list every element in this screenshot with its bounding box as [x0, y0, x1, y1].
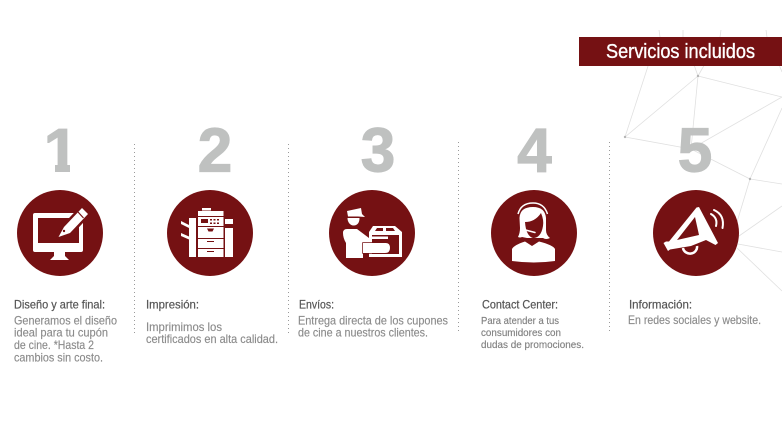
icon: copier — [167, 190, 253, 276]
step 3: envíos — [298, 116, 448, 340]
description: dudas de promociones. — [481, 339, 584, 351]
number 5: 5 — [678, 116, 712, 186]
label: Contact Center: Contact Center: — [482, 298, 558, 312]
icon: megaphone — [653, 190, 739, 276]
label: Envíos: Envíos: — [299, 298, 334, 312]
step 4: contact center — [481, 116, 584, 351]
step 2: impresión — [146, 116, 278, 346]
description — [298, 314, 448, 340]
description — [481, 315, 584, 351]
title banner: Servicios incluidos — [606, 41, 755, 63]
description: Entrega directa de los cupones — [298, 314, 448, 328]
description: de cine. *Hasta 2 — [14, 338, 94, 352]
description: certificados en alta calidad. — [146, 332, 278, 346]
description: cambios sin costo. — [14, 350, 103, 364]
description — [146, 320, 278, 346]
description: de cine a nuestros clientes. — [298, 326, 428, 340]
number 1: 1 — [44, 117, 78, 186]
label: Impresión: Impresión: — [146, 298, 199, 312]
description: consumidores con — [481, 327, 561, 339]
number 2: 2 — [198, 116, 232, 186]
description: Imprimimos los — [146, 320, 222, 334]
description — [14, 314, 117, 364]
icon: call center agent — [491, 190, 577, 276]
icon: monitor with pencil — [17, 190, 103, 276]
description: Para atender a tus — [481, 315, 559, 327]
step 5: información — [628, 116, 761, 327]
description: ideal para tu cupón — [14, 326, 108, 340]
number 4: 4 — [517, 116, 552, 186]
icon: courier with box — [329, 190, 415, 276]
description: Generamos el diseño — [14, 314, 117, 328]
description: En redes sociales y website. — [628, 313, 761, 327]
step 1: diseño y arte final — [14, 117, 117, 364]
label: Información: Información: — [629, 298, 692, 312]
number 3: 3 — [361, 116, 395, 186]
title banner — [579, 37, 782, 66]
label: Diseño y arte final: Diseño y arte final: — [14, 298, 105, 312]
